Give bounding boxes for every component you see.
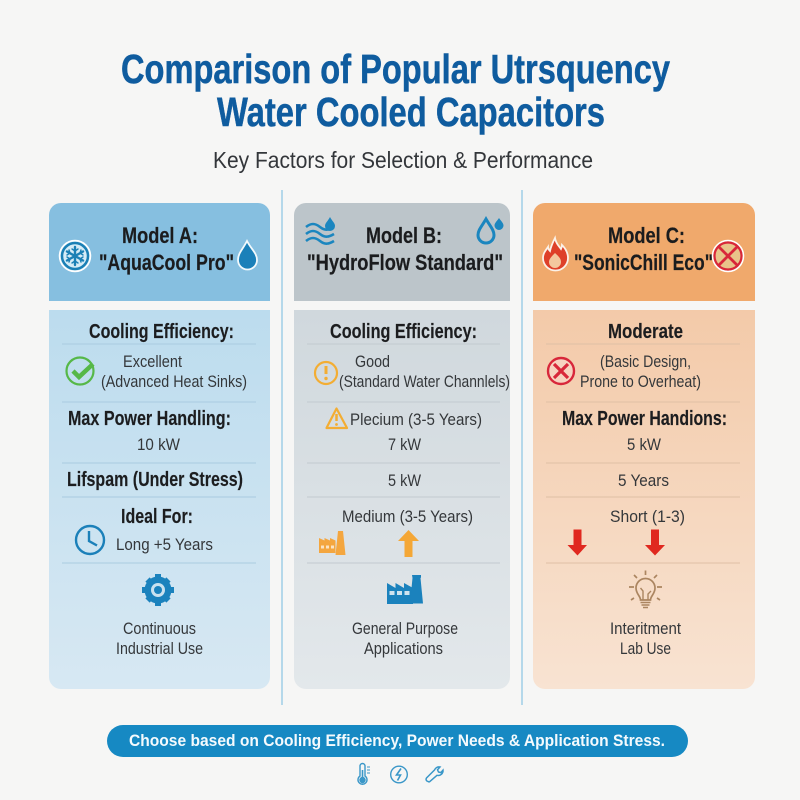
- header: Model A: "AquaCool Pro": [99, 250, 234, 275]
- row: cooling efficiency: Cooling Efficiency:: [89, 321, 234, 343]
- text: ideal use A: [116, 619, 203, 658]
- icon: small factory: [319, 531, 346, 555]
- row: ideal for: Ideal For:: [121, 506, 193, 528]
- arrow: down right: [645, 530, 665, 556]
- text: ideal use B: [352, 619, 458, 658]
- panel: Model A: [49, 203, 270, 689]
- icon: snowflake: [60, 240, 90, 272]
- banner: recommendation: Choose based on Cooling Efficiency, Power Needs & Application Stress.: [129, 731, 665, 750]
- row: moderate: (Basic Design,: [600, 352, 691, 371]
- icon: thermometer: [358, 764, 370, 784]
- text: ideal use C: Interitment: [610, 619, 681, 638]
- icon: bolt: [391, 766, 407, 783]
- row: lifespan: Lifspam (Under Stress): [67, 469, 243, 491]
- icon: cross: [548, 358, 574, 384]
- icon: flame: [543, 238, 568, 270]
- header: Model C: "SonicChill Eco": [574, 250, 713, 275]
- row: lifespan premium: Plecium (3-5 Years): [350, 410, 482, 429]
- text: ideal use C: [610, 619, 681, 658]
- row: 5 kW: 5 kW: [627, 435, 661, 454]
- text: ideal use A: Continuous: [123, 619, 196, 638]
- arrow: down left: [568, 530, 587, 556]
- row: cooling efficiency: (Advanced Heat Sinks): [101, 372, 247, 391]
- row: cooling efficiency: Good: [355, 352, 390, 371]
- row: moderate: Prone to Overheat): [580, 372, 701, 391]
- row: 7 kW: 7 kW: [388, 435, 421, 454]
- row: medium: Medium (3-5 Years): [342, 507, 473, 526]
- header: Model B: "HydroFlow Standard": [307, 250, 503, 275]
- text: ideal use B: General Purpose: [352, 619, 458, 638]
- row: max power handling: Max Power Handling:: [68, 408, 231, 430]
- text: ideal use B: Applications: [364, 639, 443, 658]
- row: moderate: Moderate: [608, 321, 683, 343]
- arrow: up: [398, 530, 419, 557]
- row: ideal for: [116, 506, 213, 554]
- header: Model C: Model C:: [608, 223, 685, 248]
- row: ideal for: Long +5 Years: [116, 535, 213, 554]
- icon: clock: [76, 526, 104, 554]
- icon: waves: [306, 217, 335, 244]
- row: cooling efficiency: Cooling Efficiency:: [330, 321, 477, 343]
- row: cooling efficiency: (Standard Water Channlels): [339, 372, 510, 391]
- text: ideal use C: Lab Use: [620, 639, 671, 658]
- row: short: Short (1-3): [610, 507, 685, 526]
- icon: factory: [387, 575, 423, 604]
- title: Water Cooled Capacitors: [217, 89, 605, 135]
- row: max power handling: 10 kW: [137, 435, 180, 454]
- icon: gear: [142, 574, 174, 606]
- row: 5 years: 5 Years: [618, 471, 669, 490]
- icon: wrench: [426, 767, 443, 782]
- row: max power handling: [68, 408, 231, 454]
- icon: warning triangle: [326, 408, 347, 428]
- body: Model C: [533, 310, 755, 689]
- text: ideal use A: Industrial Use: [116, 639, 203, 658]
- icon: light bulb: [629, 570, 662, 608]
- panel: Model C: [533, 203, 755, 689]
- icon: cross badge: [712, 240, 744, 272]
- header: Model B: Model B:: [366, 223, 442, 248]
- icon: check: [66, 358, 94, 384]
- row: cooling efficiency: [330, 321, 510, 391]
- title: [121, 46, 670, 135]
- panel: Model B: [294, 203, 510, 689]
- body: Model A: [49, 310, 270, 689]
- header: Model A: Model A:: [122, 223, 198, 248]
- header: Model C: [533, 203, 755, 301]
- row: cooling efficiency: Excellent: [123, 352, 182, 371]
- title: Comparison of Popular Utrsquency: [121, 46, 670, 92]
- row: 5 kW: 5 kW: [388, 471, 421, 490]
- icon: water drop: [238, 241, 257, 270]
- body: Model B: [294, 310, 510, 689]
- row: cooling efficiency: [89, 321, 247, 391]
- icon: warning circle: [315, 362, 337, 384]
- banner: recommendation: [107, 725, 688, 757]
- header: Model B: [294, 203, 510, 301]
- subtitle: Key Factors for Selection & Performance: [213, 147, 593, 173]
- icon: drops: [478, 218, 504, 243]
- header: Model A: [49, 203, 270, 301]
- row: moderate: [580, 321, 701, 391]
- row: max power: Max Power Handions:: [562, 408, 727, 430]
